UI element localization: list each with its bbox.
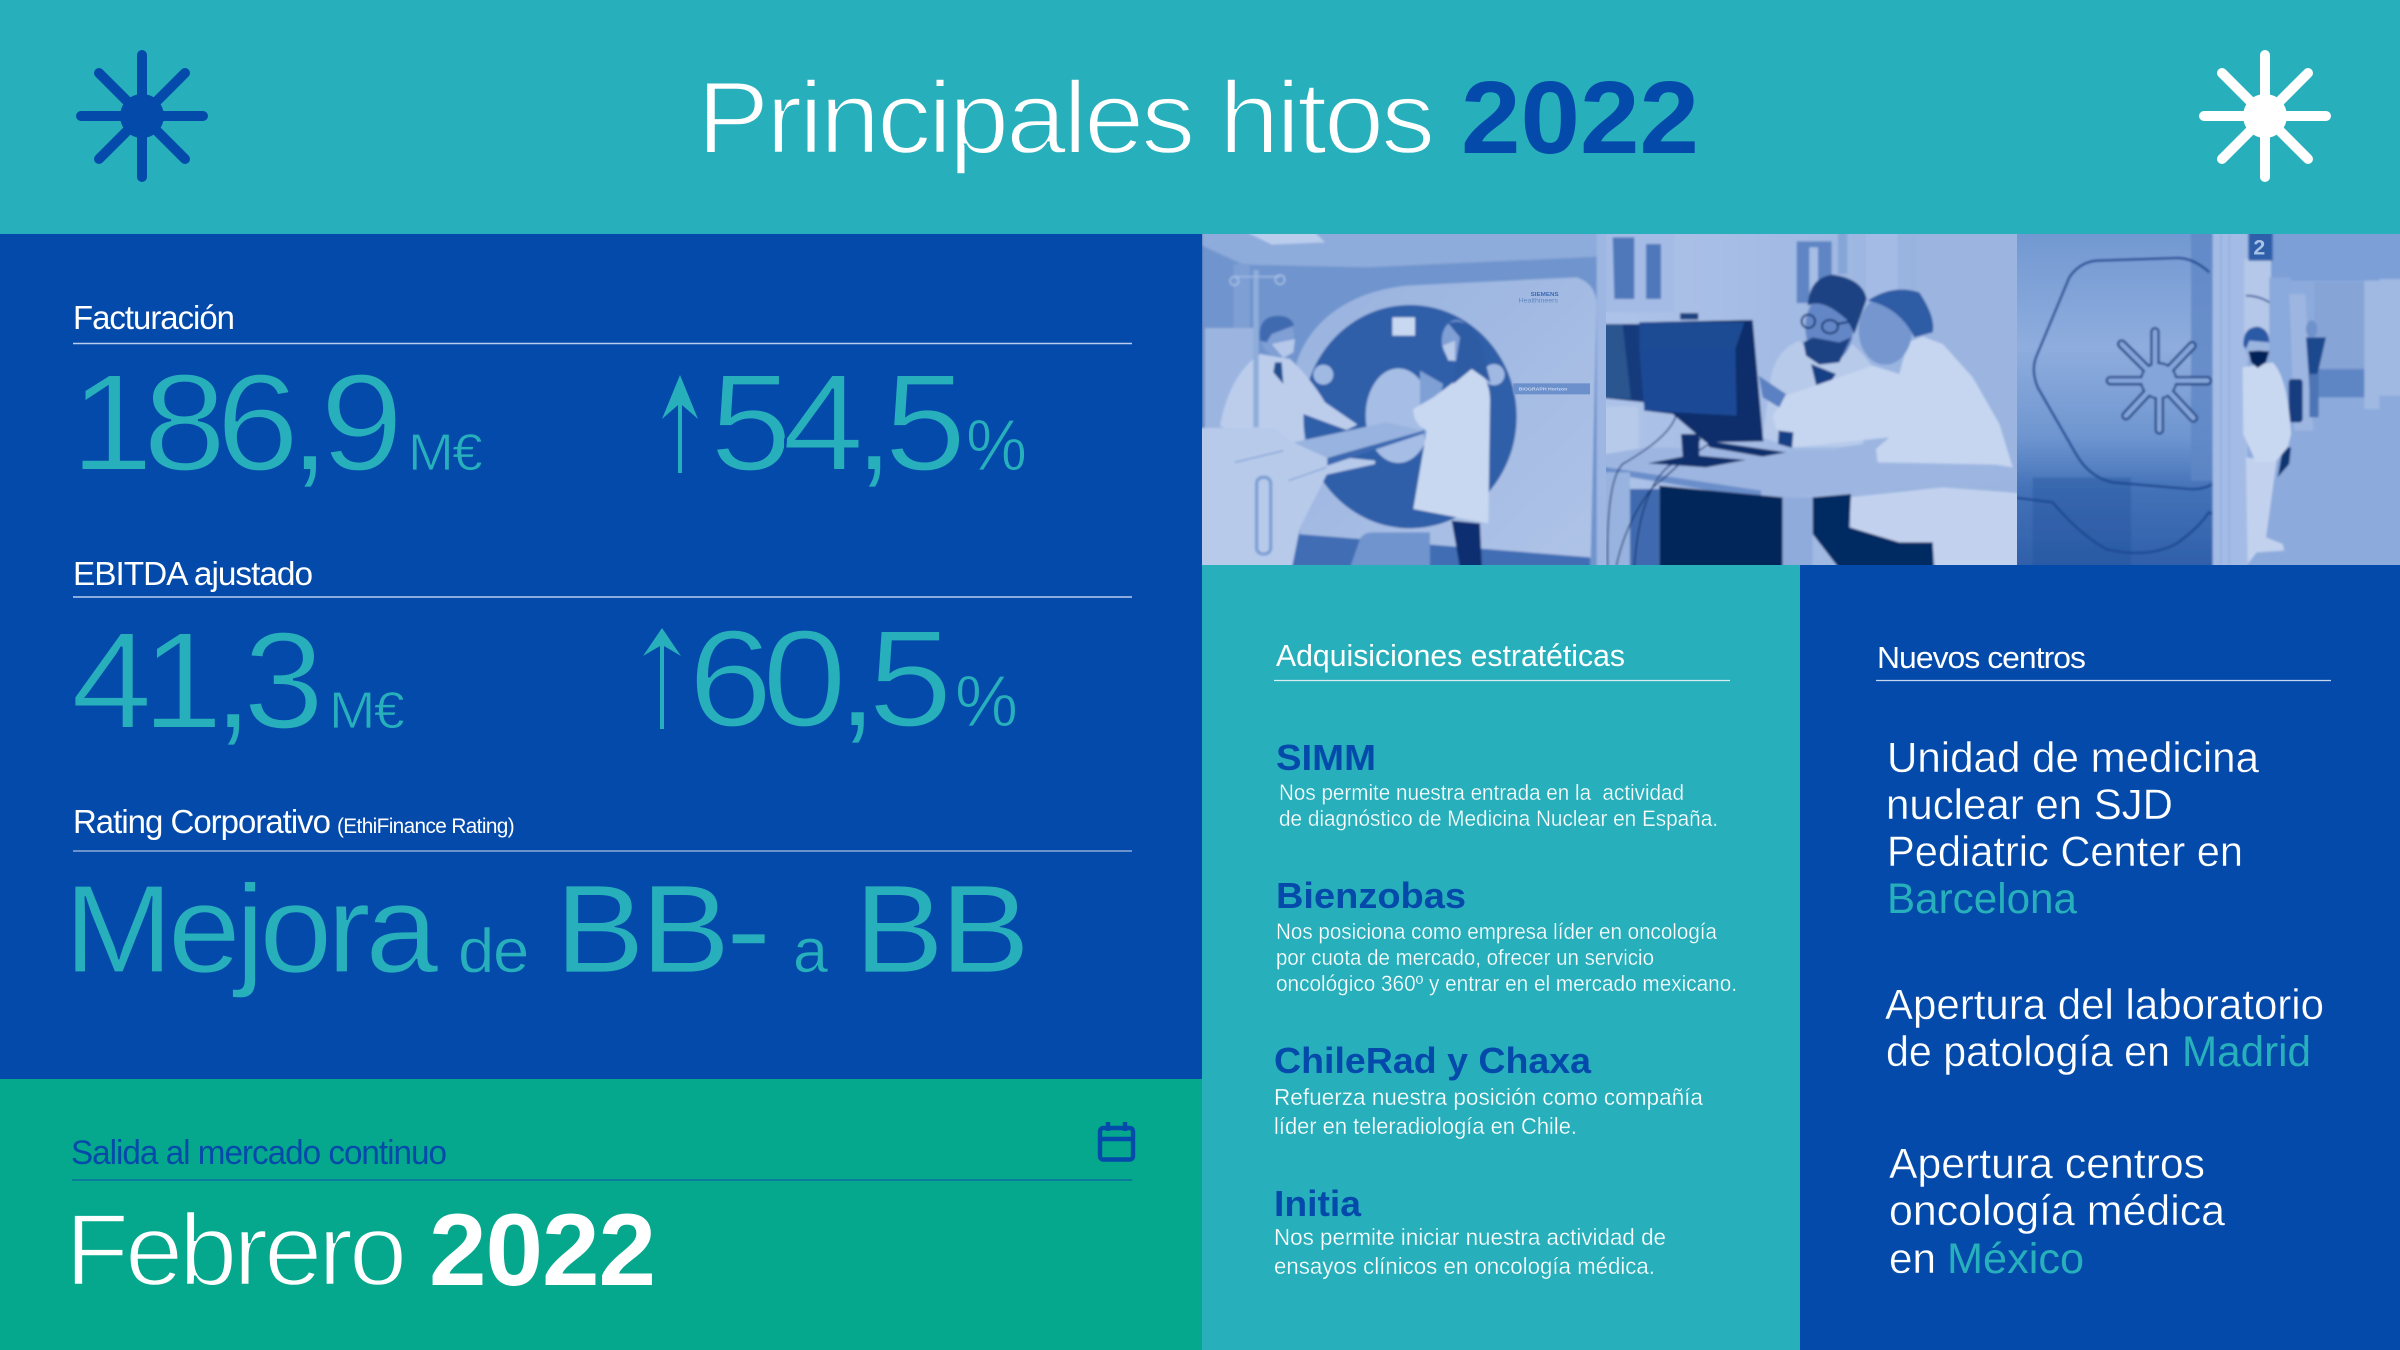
photo: doctors at computer <box>1606 234 2017 565</box>
item: Initia: ensayos clínicos en oncología médica. <box>1274 1253 1655 1279</box>
heading: Salida al mercado continuo: Salida al mercado continuo <box>71 1134 446 1172</box>
centre: Madrid: Madrid <box>2182 1028 2311 1076</box>
item: SIMM: SIMM <box>1276 737 1376 778</box>
label: scanner brand: Healthineers <box>1519 299 1558 305</box>
centre: México: Apertura centros <box>1889 1140 2205 1188</box>
figure: EBITDA <box>71 604 405 758</box>
figure: EBITDA growth <box>688 602 1018 756</box>
heading: Facturación: Facturación <box>73 299 234 336</box>
icon: calendar <box>1100 1122 1133 1160</box>
arrow: EBITDA growth <box>643 628 681 729</box>
figure: revenue: M€ <box>408 424 483 482</box>
header band <box>0 0 2400 234</box>
item: ChileRad y Chaxa: Refuerza nuestra posición como compañía <box>1274 1084 1703 1110</box>
item: SIMM: Nos permite nuestra entrada en la actividad <box>1279 780 1684 805</box>
label: scanner brand <box>1519 292 1558 302</box>
heading: Rating Corporativo: (EthiFinance Rating) <box>337 815 514 838</box>
icon: blue asterisk logo <box>81 55 203 177</box>
rating statement: Mejora <box>64 860 439 999</box>
item: Initia <box>1274 1183 1666 1279</box>
centre: México: en <box>1889 1235 1936 1283</box>
figure: EBITDA: 41,3 <box>71 604 318 758</box>
photo: clinic corridor with nurse <box>2006 224 2400 577</box>
item: Bienzobas: Nos posiciona como empresa líder en oncología <box>1276 919 1718 944</box>
rating statement <box>64 860 1026 999</box>
centre: México: oncología médica <box>1889 1187 2225 1235</box>
centre: México <box>1889 1140 2225 1283</box>
label: scanner band <box>1513 383 1590 394</box>
icon: white asterisk logo <box>2204 55 2326 177</box>
item: Initia: Nos permite iniciar nuestra actividad de <box>1274 1224 1666 1250</box>
figure: revenue: 186,9 <box>70 346 397 500</box>
date: 2022 <box>429 1193 655 1307</box>
figure: EBITDA: M€ <box>329 682 405 740</box>
panel: new centres <box>1800 565 2400 1350</box>
rating statement: BB <box>854 860 1026 999</box>
item: ChileRad y Chaxa: ChileRad y Chaxa <box>1274 1040 1592 1081</box>
item: ChileRad y Chaxa <box>1274 1040 1703 1139</box>
centre: Barcelona: Unidad de medicina <box>1887 734 2259 782</box>
item: Bienzobas <box>1276 875 1737 996</box>
item: SIMM <box>1276 737 1718 831</box>
figure: revenue growth: 54,5 <box>710 346 960 500</box>
centre: México: México <box>1947 1235 2084 1283</box>
figure: EBITDA growth: % <box>955 662 1018 742</box>
title: 2022 <box>1461 60 1699 175</box>
rating statement: a <box>793 917 829 986</box>
label: bay number: 2 <box>2253 236 2265 260</box>
centre: Madrid: de patología en <box>1886 1028 2170 1076</box>
item: SIMM: de diagnóstico de Medicina Nuclear en España. <box>1279 806 1718 831</box>
figure: EBITDA growth: 60,5 <box>688 602 946 756</box>
heading: Nuevos centros: Nuevos centros <box>1877 640 2085 675</box>
panel: financial figures <box>0 234 1202 1079</box>
photo: PET scanner room <box>1202 234 1606 565</box>
heading: EBITDA ajustado: EBITDA ajustado <box>73 555 312 592</box>
heading: Rating Corporativo: Rating Corporativo <box>73 803 330 840</box>
panel: strategic acquisitions <box>1202 565 1800 1350</box>
centre: Barcelona <box>1886 734 2259 923</box>
centre: Barcelona: Barcelona <box>1887 875 2077 923</box>
date <box>65 1193 655 1307</box>
centre: Barcelona: nuclear en SJD <box>1886 781 2173 829</box>
arrow: revenue growth <box>662 375 698 473</box>
rating statement: de <box>458 917 528 986</box>
title <box>697 60 1699 175</box>
title: Principales hitos <box>697 60 1432 175</box>
centre: Madrid <box>1885 981 2324 1076</box>
date: Febrero <box>65 1193 403 1307</box>
item: Initia: Initia <box>1274 1183 1362 1224</box>
item: Bienzobas: oncológico 360º y entrar en el mercado mexicano. <box>1276 971 1737 996</box>
centre: Madrid: Apertura del laboratorio <box>1885 981 2324 1029</box>
heading: Adquisiciones estratéticas: Adquisiciones estratéticas <box>1276 638 1625 673</box>
label: scanner brand: SIEMENS <box>1531 292 1559 298</box>
figure: revenue growth: % <box>966 406 1027 486</box>
item: Bienzobas: por cuota de mercado, ofrecer un servicio <box>1276 945 1654 970</box>
panel: stock market debut <box>0 1079 1203 1350</box>
heading: Rating Corporativo <box>73 803 514 840</box>
centre: Barcelona: Pediatric Center en <box>1887 828 2243 876</box>
item: ChileRad y Chaxa: líder en teleradiología en Chile. <box>1274 1113 1577 1139</box>
label: scanner band: BIOGRAPH Horizon <box>1519 387 1568 392</box>
rating statement: BB- <box>555 860 767 999</box>
item: Bienzobas: Bienzobas <box>1276 875 1466 916</box>
